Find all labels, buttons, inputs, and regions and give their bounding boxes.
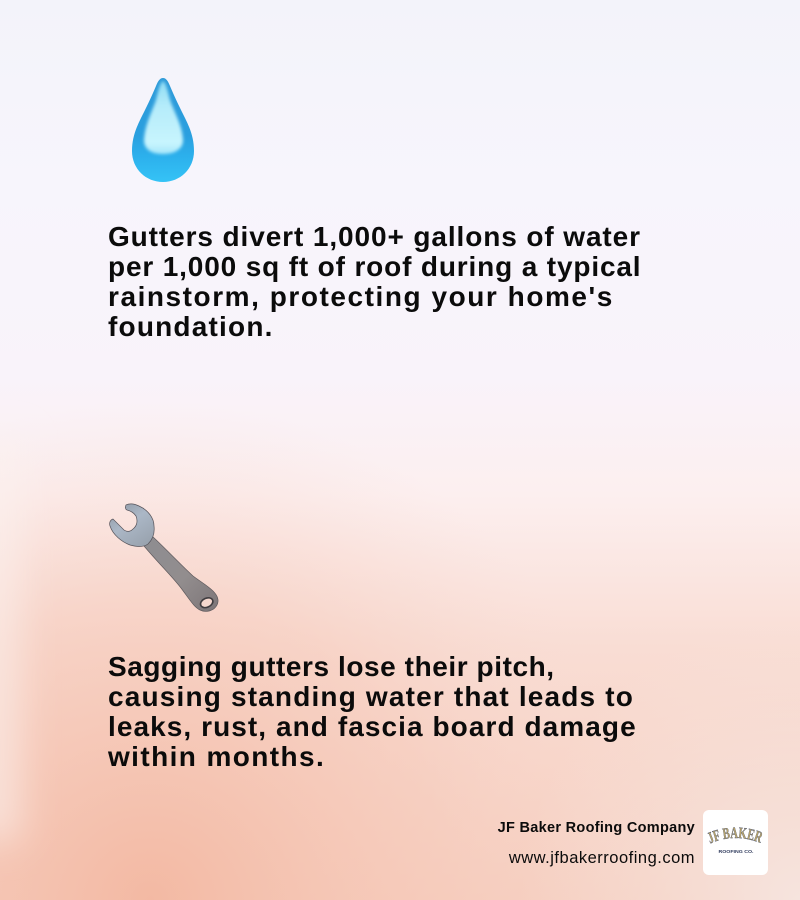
text: sagging gutters fact: Sagging gutters lose their pitch, <box>108 651 555 682</box>
text: sagging gutters fact: causing standing water that leads to <box>108 681 634 712</box>
icon: wrench <box>109 504 218 612</box>
text: sagging gutters fact: within months. <box>108 741 325 772</box>
text: gutters fact <box>108 221 641 342</box>
text: gutters fact: per 1,000 sq ft of roof during a typical <box>108 251 641 282</box>
text: sagging gutters fact <box>108 651 637 772</box>
text: gutters fact: foundation. <box>108 311 274 342</box>
logo <box>703 810 768 875</box>
logo: JF BAKER <box>708 827 762 844</box>
icon: water drop <box>132 78 194 182</box>
text: gutters fact: rainstorm, protecting your home's <box>108 281 614 312</box>
text: gutters fact: Gutters divert 1,000+ gallons of water <box>108 221 641 252</box>
footer: website: www.jfbakerroofing.com <box>509 849 695 867</box>
text: sagging gutters fact: leaks, rust, and fascia board damage <box>108 711 637 742</box>
logo: ROOFING CO. <box>718 849 754 854</box>
footer: company name: JF Baker Roofing Company <box>498 820 695 836</box>
